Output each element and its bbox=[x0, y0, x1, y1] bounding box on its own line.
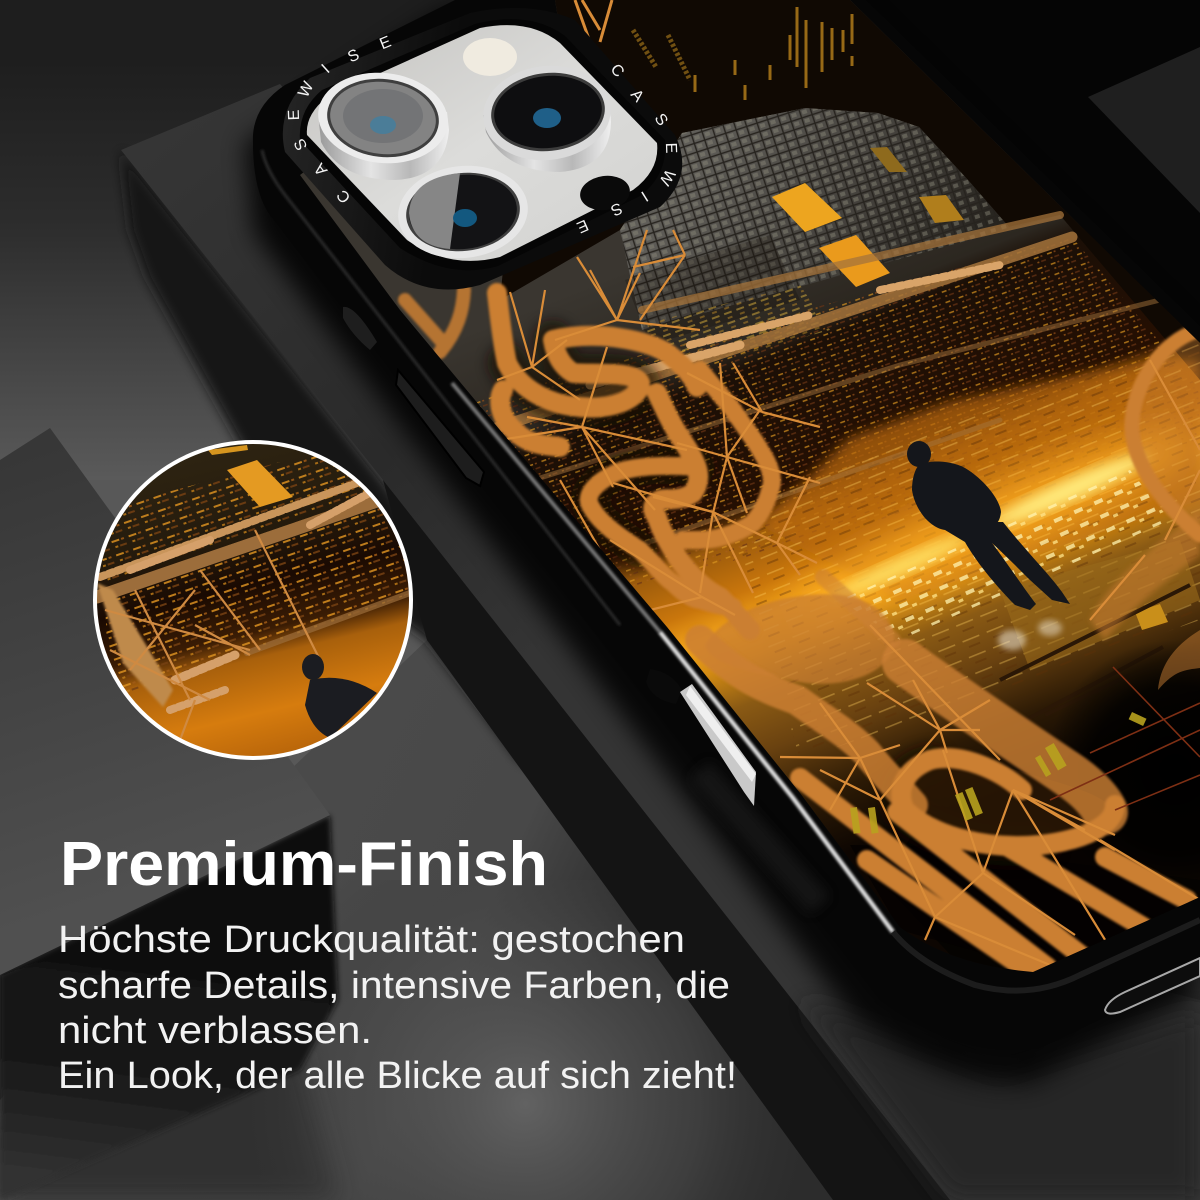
CASEWISE lettering: I bbox=[319, 61, 333, 77]
inset code texture bbox=[102, 456, 409, 692]
flash bbox=[463, 38, 517, 76]
inset web lines bbox=[105, 530, 320, 740]
body text: nicht verblassen. bbox=[58, 1010, 372, 1052]
bezel bbox=[283, 8, 682, 290]
lens 1 bbox=[314, 66, 452, 180]
CASEWISE lettering: S bbox=[608, 199, 625, 219]
bottom text specks bbox=[850, 712, 1147, 834]
body text: Höchste Druckqualität: gestochen bbox=[58, 919, 685, 961]
CASEWISE lettering: S bbox=[291, 136, 311, 153]
CASEWISE lettering: A bbox=[627, 86, 647, 106]
inset yellow panel bbox=[227, 460, 293, 507]
gray grid dome bbox=[620, 108, 1006, 339]
bottom tube fill bbox=[916, 768, 1086, 836]
CASEWISE lettering: S bbox=[345, 46, 362, 66]
inset beams bbox=[97, 483, 410, 710]
phone shadow bbox=[245, 8, 1192, 1084]
body text bbox=[58, 919, 737, 1097]
lens 3 bbox=[394, 159, 532, 265]
side button bbox=[396, 370, 484, 486]
CASEWISE lettering: I bbox=[638, 187, 651, 204]
heading: Premium-Finish bbox=[60, 830, 548, 899]
thin web lines bbox=[497, 230, 1200, 965]
CASEWISE lettering: E bbox=[377, 34, 394, 53]
CASEWISE lettering: C bbox=[334, 186, 354, 206]
CASEWISE lettering: E bbox=[662, 142, 679, 154]
side port top bbox=[343, 307, 377, 350]
CASEWISE lettering: E bbox=[574, 216, 591, 236]
charging port bbox=[1105, 958, 1200, 1014]
camera island bbox=[283, 8, 682, 290]
CASEWISE lettering: W bbox=[655, 166, 678, 189]
bottom code texture bbox=[730, 330, 1200, 760]
black lower-right pool bbox=[1068, 650, 1200, 863]
glowing chain tubes bbox=[405, 290, 1200, 970]
tube shadow bbox=[507, 340, 1040, 846]
phone artwork bbox=[290, 0, 1200, 980]
phone case body bbox=[253, 0, 1200, 1050]
camera control button bbox=[646, 669, 756, 806]
inset figure bbox=[302, 654, 377, 738]
translucent loops bbox=[705, 330, 1200, 690]
CASEWISE lettering: A bbox=[311, 159, 331, 179]
top dark city area bbox=[500, 0, 1200, 380]
code band bbox=[440, 237, 1200, 590]
inset detail circle bbox=[90, 430, 420, 760]
body text: Ein Look, der alle Blicke auf sich zieht! bbox=[58, 1055, 737, 1097]
inset tube bbox=[97, 583, 173, 707]
bright panel code bbox=[640, 285, 830, 375]
CASEWISE lettering bbox=[286, 34, 679, 236]
CASEWISE lettering: W bbox=[295, 78, 318, 100]
CASEWISE lettering: C bbox=[607, 61, 627, 81]
horizon glow bbox=[780, 418, 1195, 640]
body text: scharfe Details, intensive Farben, die bbox=[58, 965, 730, 1007]
yellow data panels bbox=[772, 147, 964, 287]
CASEWISE lettering: S bbox=[651, 111, 671, 129]
beams bbox=[460, 215, 1180, 545]
person silhouette bbox=[907, 441, 1070, 610]
lower platforms bbox=[994, 542, 1200, 682]
CASEWISE lettering: E bbox=[286, 109, 303, 121]
lidar dot bbox=[578, 173, 632, 213]
bezel lip bbox=[300, 19, 665, 270]
upper orange haze bbox=[760, 360, 1200, 600]
glass plate bbox=[307, 25, 657, 261]
lens 2 bbox=[478, 60, 616, 172]
red reflection lines bbox=[1050, 667, 1200, 810]
